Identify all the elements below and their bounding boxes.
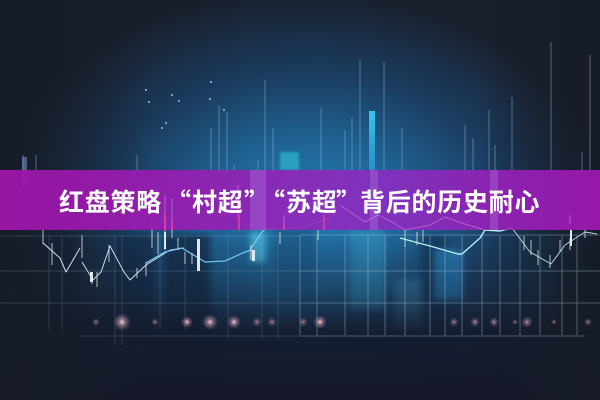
title xyxy=(59,183,540,219)
lower grid lines, right xyxy=(300,235,600,336)
lower grid lines, left xyxy=(0,235,300,345)
title: ” xyxy=(244,183,270,219)
stars xyxy=(145,81,225,129)
lower line chart xyxy=(43,218,597,280)
title: 背后的历史耐心 xyxy=(360,183,540,219)
title: “ xyxy=(260,183,286,219)
title: ” xyxy=(336,183,362,219)
title: 村超 xyxy=(192,183,244,219)
skyline blocks xyxy=(45,225,555,335)
candlesticks xyxy=(43,222,585,287)
glowing dots row xyxy=(92,313,592,331)
title: 苏超 xyxy=(286,183,338,219)
banner: purple title band xyxy=(0,170,600,230)
title: “ xyxy=(166,183,192,219)
cyan glowing bars xyxy=(22,111,375,187)
title: 红盘策略 xyxy=(59,183,162,219)
upper thin vertical lines xyxy=(23,42,590,172)
